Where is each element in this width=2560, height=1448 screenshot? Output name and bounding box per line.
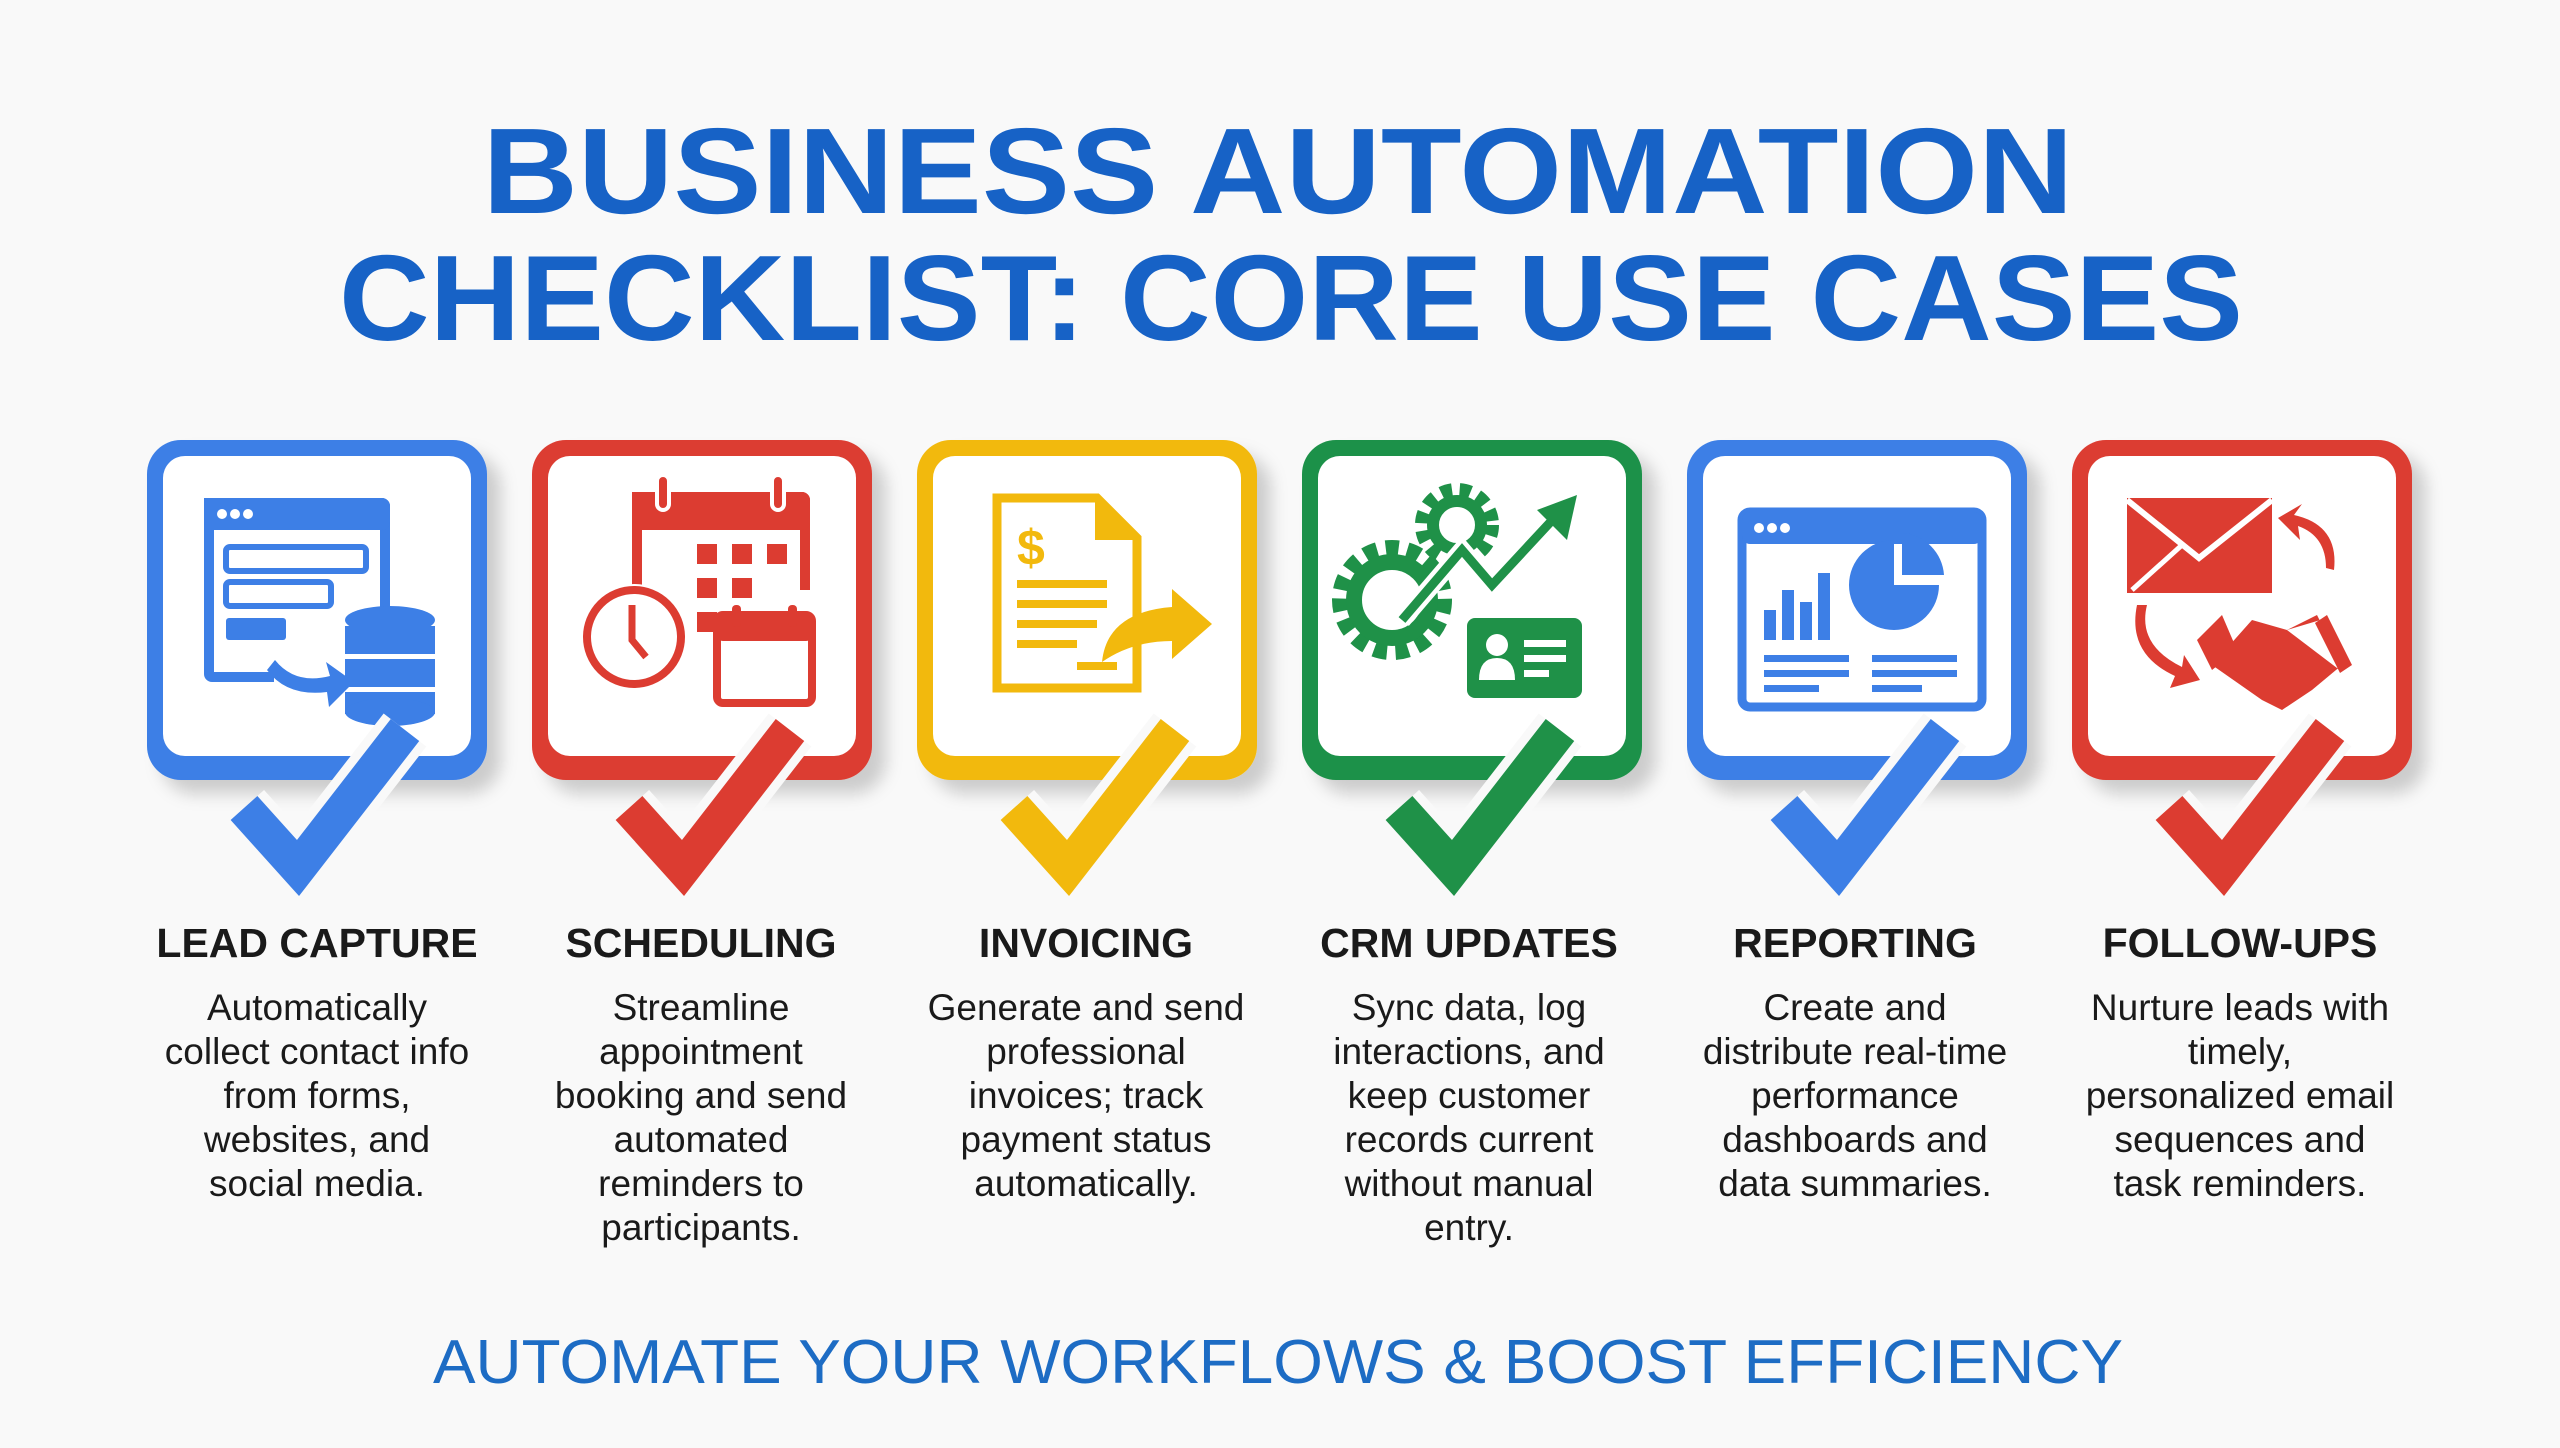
label: lead capture: websites, and: [203, 1119, 430, 1160]
checkmark: [1399, 730, 1560, 868]
label: crm updates: [1320, 920, 1618, 1248]
label: follow-ups: sequences and: [2115, 1119, 2365, 1160]
label: crm updates: keep customer: [1348, 1075, 1590, 1116]
label: lead capture: [156, 920, 478, 1204]
label: scheduling: automated: [614, 1119, 788, 1160]
checkmark: [244, 730, 405, 868]
icon: invoice with arrow: [997, 498, 1212, 688]
label: invoicing: automatically.: [974, 1163, 1198, 1204]
label: reporting: REPORTING: [1733, 920, 1977, 966]
icon: dashboard: [1742, 512, 1982, 707]
label: lead capture: Automatically: [207, 987, 428, 1028]
label: follow-ups: Nurture leads with: [2091, 987, 2389, 1028]
icon: gears, arrow, id card: [1344, 493, 1582, 698]
label: lead capture: collect contact info: [165, 1031, 469, 1072]
icon: form to database: [204, 498, 435, 726]
title: BUSINESS AUTOMATION: [482, 103, 2074, 239]
checkmark: [629, 730, 790, 868]
label: follow-ups: personalized email: [2086, 1075, 2394, 1116]
label: scheduling: [555, 920, 847, 1248]
card: invoicing: [917, 440, 1257, 868]
label: follow-ups: task reminders.: [2114, 1163, 2366, 1204]
label: invoicing: payment status: [961, 1119, 1211, 1160]
checkmark: [2169, 730, 2330, 868]
label: scheduling: SCHEDULING: [565, 920, 837, 966]
label: follow-ups: [2086, 920, 2394, 1204]
label: lead capture: social media.: [209, 1163, 425, 1204]
card: crm updates: [1302, 440, 1642, 868]
checkmark: [1014, 730, 1175, 868]
label: crm updates: entry.: [1424, 1207, 1514, 1248]
icon: calendar with clock: [581, 475, 812, 703]
checkmark: [1784, 730, 1945, 868]
title: [339, 103, 2243, 366]
card: lead capture: [147, 440, 487, 868]
label: follow-ups: timely,: [2188, 1031, 2292, 1072]
card: scheduling: [532, 440, 872, 868]
label: invoicing: professional: [986, 1031, 1186, 1072]
label: scheduling: appointment: [599, 1031, 804, 1072]
label: reporting: performance: [1751, 1075, 1959, 1116]
label: lead capture: from forms,: [223, 1075, 411, 1116]
label: scheduling: Streamline: [613, 987, 789, 1028]
label: follow-ups: FOLLOW-UPS: [2103, 920, 2377, 966]
label: crm updates: Sync data, log: [1352, 987, 1586, 1028]
label: crm updates: without manual: [1344, 1163, 1593, 1204]
icon: email and handshake: [2127, 498, 2357, 710]
label: invoicing: invoices; track: [969, 1075, 1204, 1116]
icon: invoice with arrow: $: [1017, 520, 1045, 576]
label: invoicing: INVOICING: [979, 920, 1193, 966]
label: crm updates: interactions, and: [1333, 1031, 1605, 1072]
label: reporting: dashboards and: [1722, 1119, 1988, 1160]
card: follow-ups: [2072, 440, 2412, 868]
footer tagline: AUTOMATE YOUR WORKFLOWS & BOOST EFFICIENCY: [433, 1328, 2123, 1397]
label: reporting: Create and: [1763, 987, 1947, 1028]
label: crm updates: CRM UPDATES: [1320, 920, 1618, 966]
label: scheduling: participants.: [601, 1207, 801, 1248]
labels and descriptions: [156, 920, 2394, 1248]
title: CHECKLIST: CORE USE CASES: [339, 230, 2243, 366]
label: scheduling: booking and send: [555, 1075, 847, 1116]
label: reporting: [1703, 920, 2007, 1204]
label: reporting: data summaries.: [1718, 1163, 1992, 1204]
card: reporting: [1687, 440, 2027, 868]
label: reporting: distribute real-time: [1703, 1031, 2007, 1072]
label: invoicing: Generate and send: [928, 987, 1244, 1028]
label: crm updates: records current: [1345, 1119, 1594, 1160]
label: scheduling: reminders to: [598, 1163, 804, 1204]
label: lead capture: LEAD CAPTURE: [156, 920, 478, 966]
label: invoicing: [928, 920, 1244, 1204]
